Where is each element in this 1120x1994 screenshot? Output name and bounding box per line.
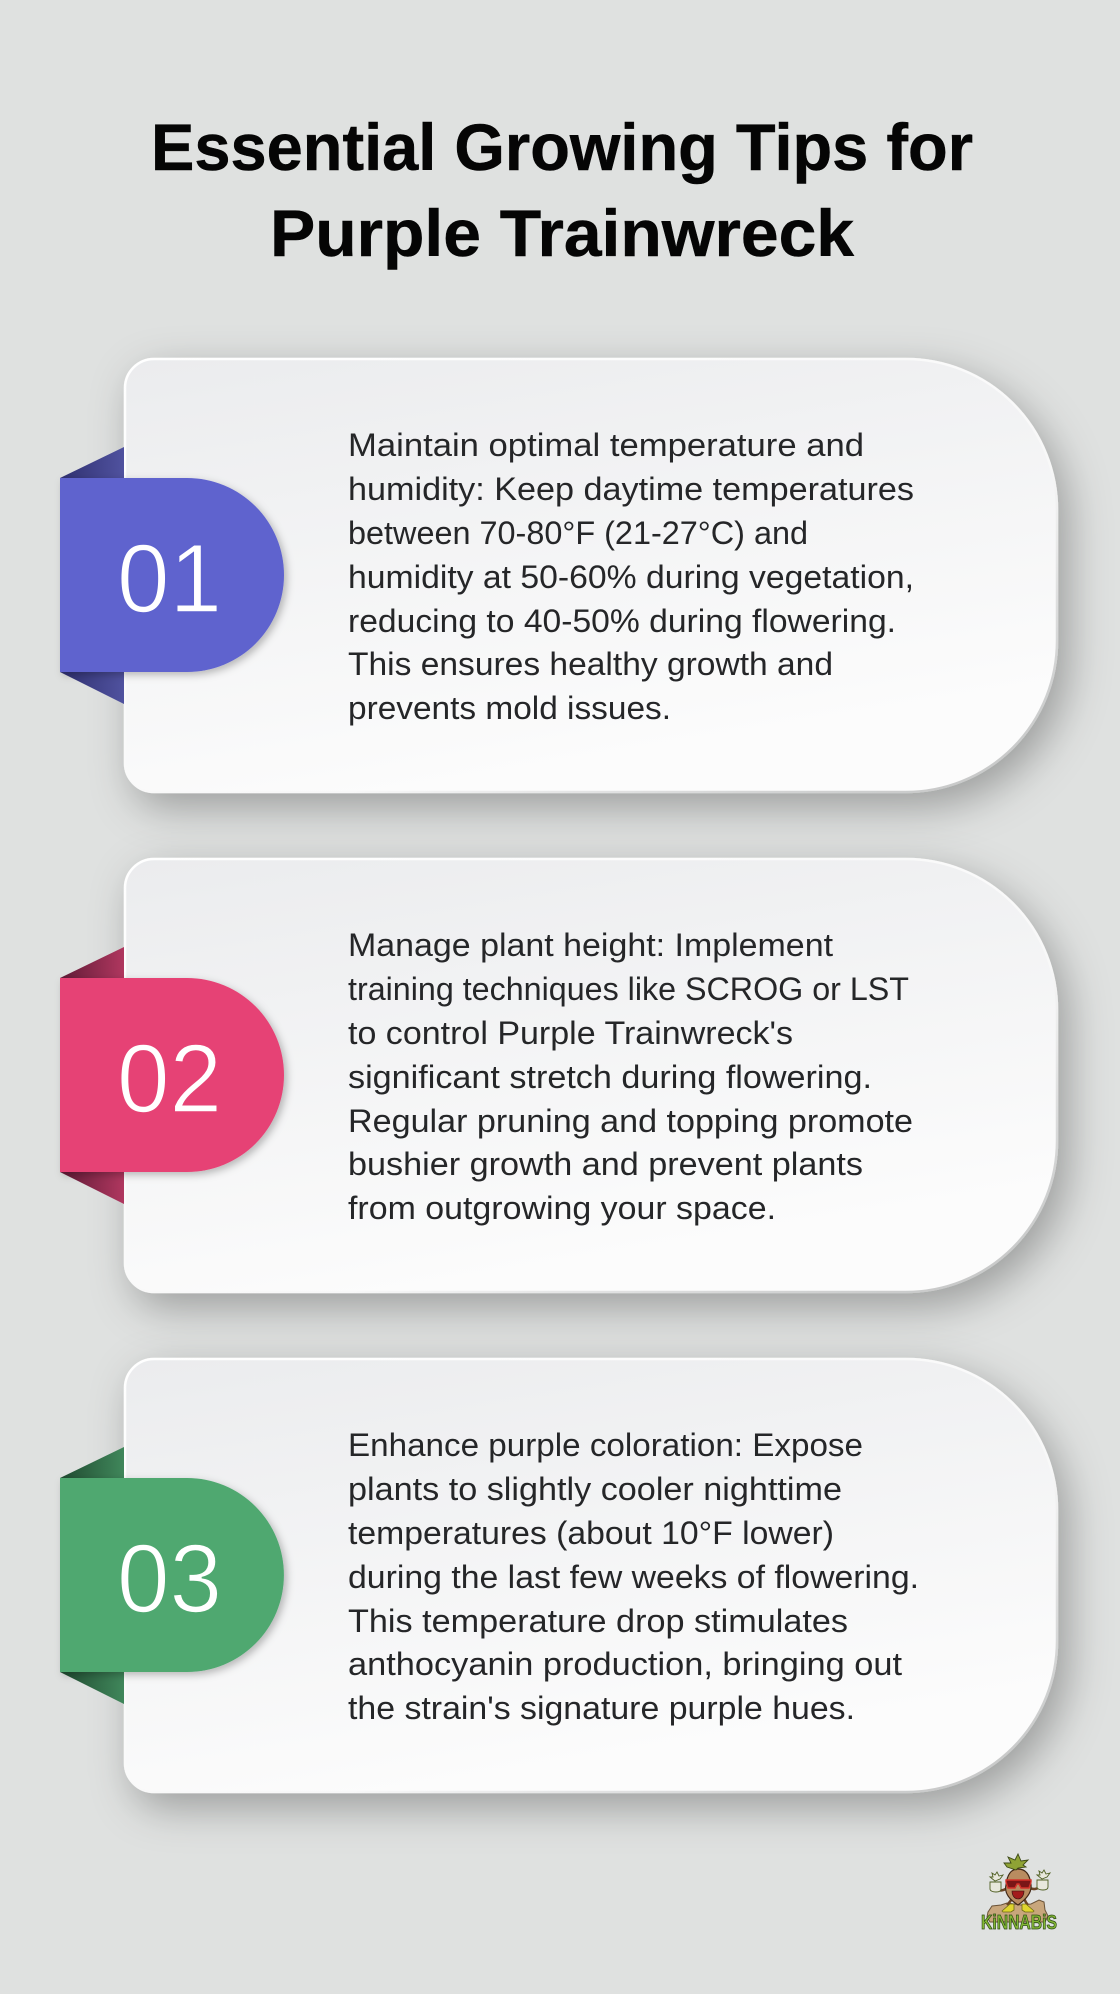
- title: Purple Trainwreck: [270, 196, 854, 270]
- tip text: temperatures (about 10°F lower): [348, 1515, 834, 1551]
- tip text: reducing to 40-50% during flowering.: [348, 603, 896, 639]
- card background: [125, 359, 1057, 792]
- tip text: the strain's signature purple hues.: [348, 1690, 855, 1726]
- top leaf: [1004, 1854, 1028, 1870]
- ribbon fold top: [60, 1447, 124, 1478]
- tip text: plants to slightly cooler nighttime: [348, 1471, 842, 1507]
- title: [151, 110, 973, 270]
- tip text: anthocyanin production, bringing out: [348, 1646, 902, 1682]
- tip text: This temperature drop stimulates: [348, 1603, 848, 1639]
- tip text: from outgrowing your space.: [348, 1190, 776, 1226]
- rock base: [987, 1900, 1048, 1922]
- tip text: training techniques like SCROG or LST: [348, 971, 909, 1007]
- tip text: [348, 427, 914, 726]
- number tab: [60, 478, 284, 672]
- ribbon fold bottom: [60, 672, 124, 704]
- sunglasses: [1006, 1880, 1031, 1888]
- left hand plant: [990, 1872, 1003, 1892]
- card background: [125, 859, 1057, 1292]
- number tab: [60, 978, 284, 1172]
- tip text: prevents mold issues.: [348, 690, 671, 726]
- logo: Kinnabis mascot: [981, 1854, 1057, 1934]
- ribbon fold bottom: [60, 1672, 124, 1704]
- tip text: to control Purple Trainwreck's: [348, 1015, 793, 1051]
- panel: tip 02 plant height: [60, 859, 1057, 1292]
- body: [1006, 1869, 1031, 1905]
- tip text: Manage plant height: Implement: [348, 927, 833, 963]
- tip text: significant stretch during flowering.: [348, 1059, 872, 1095]
- arms: [996, 1886, 1041, 1905]
- number 03: 03: [117, 1524, 222, 1633]
- number tab: [60, 1478, 284, 1672]
- tip text: humidity: Keep daytime temperatures: [348, 471, 914, 507]
- tip text: between 70-80°F (21-27°C) and: [348, 515, 808, 551]
- tip text: Enhance purple coloration: Expose: [348, 1427, 863, 1463]
- brand name: KiNNABiS: [981, 1912, 1057, 1934]
- tip text: Maintain optimal temperature and: [348, 427, 864, 463]
- mouth: [1012, 1891, 1024, 1899]
- tip text: This ensures healthy growth and: [348, 646, 833, 682]
- tip text: [348, 927, 913, 1226]
- number 02: 02: [117, 1024, 222, 1133]
- tip text: humidity at 50-60% during vegetation,: [348, 559, 914, 595]
- shoes: [1002, 1904, 1034, 1912]
- title: Essential Growing Tips for: [151, 110, 973, 184]
- tip text: during the last few weeks of flowering.: [348, 1559, 919, 1595]
- tip text: [348, 1427, 919, 1726]
- ribbon fold bottom: [60, 1172, 124, 1204]
- panel: tip 03 purple coloration: [60, 1359, 1057, 1792]
- panel: tip 01 temperature and humidity: [60, 359, 1057, 792]
- tip text: Regular pruning and topping promote: [348, 1103, 913, 1139]
- ribbon fold top: [60, 947, 124, 978]
- ribbon fold top: [60, 447, 124, 478]
- card background: [125, 1359, 1057, 1792]
- tip text: bushier growth and prevent plants: [348, 1146, 863, 1182]
- right hand plant: [1037, 1870, 1050, 1890]
- number 01: 01: [117, 524, 222, 633]
